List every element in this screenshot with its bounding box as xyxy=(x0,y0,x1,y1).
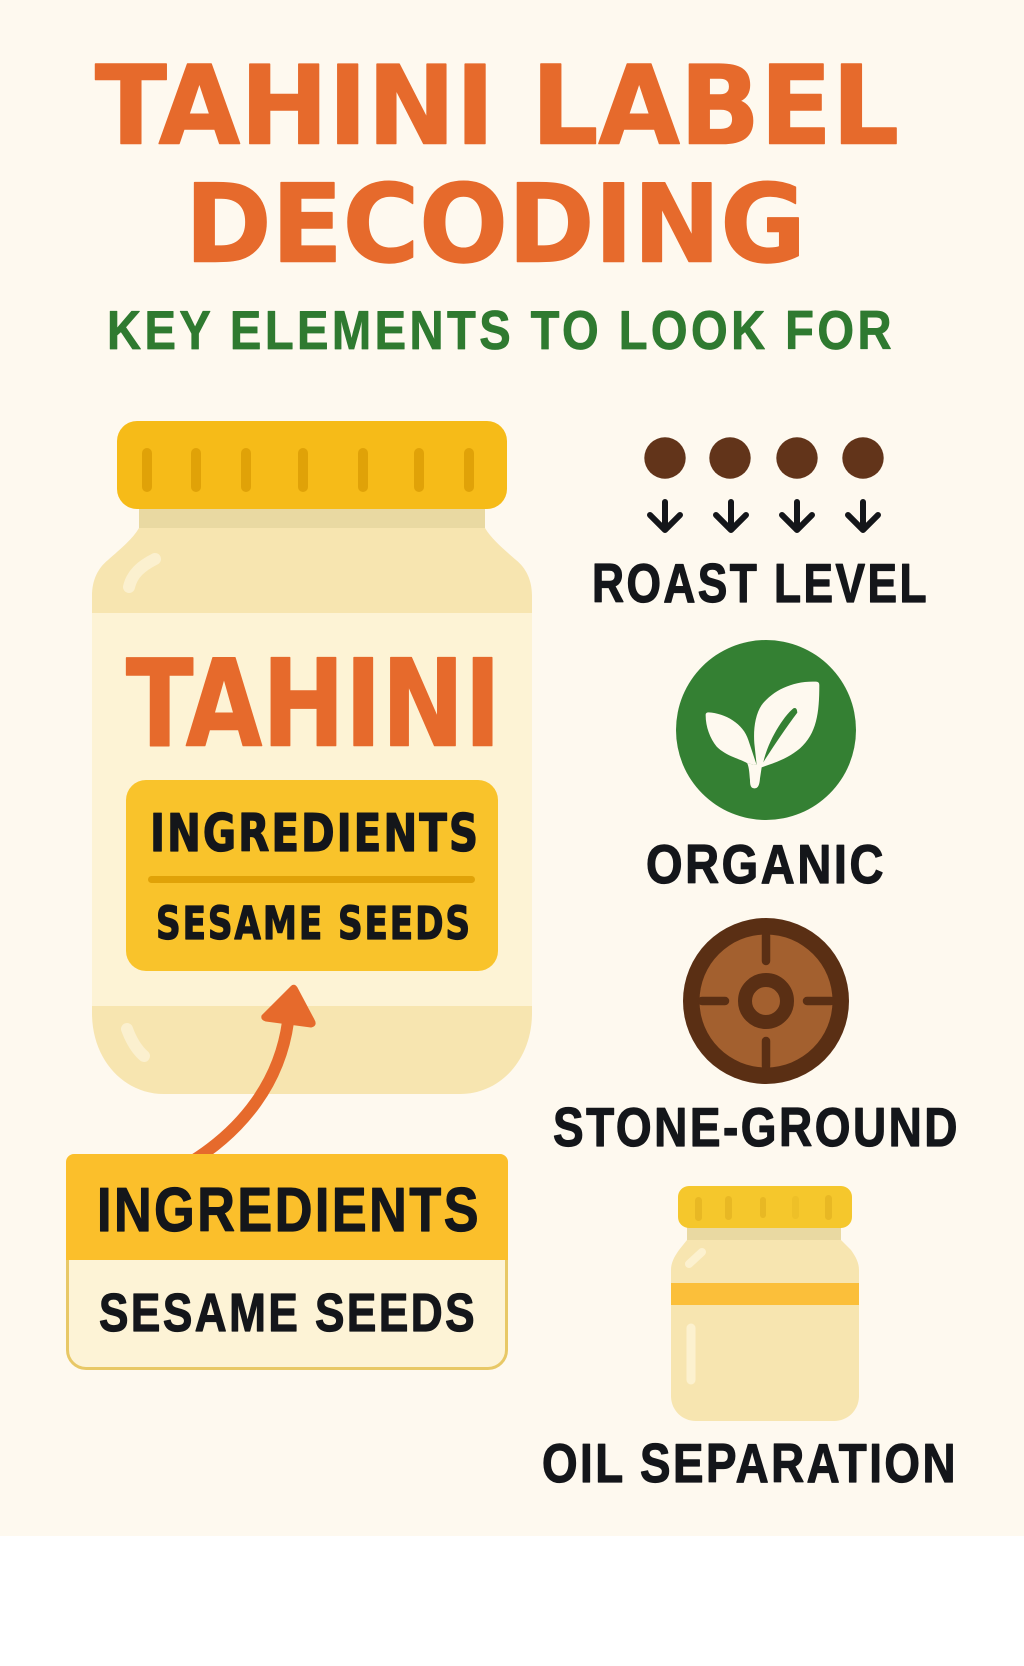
organic xyxy=(646,640,886,895)
jar label name: TAHINI xyxy=(126,636,501,774)
jar body xyxy=(92,500,532,1094)
roast level xyxy=(592,437,929,614)
label: ORGANIC xyxy=(646,833,886,895)
jar highlights xyxy=(127,559,155,1056)
callout header xyxy=(66,1154,508,1260)
large tahini jar xyxy=(92,421,532,1094)
jar lid xyxy=(117,421,507,509)
title xyxy=(95,42,899,288)
callout heading: INGREDIENTS xyxy=(97,1176,481,1245)
icon: small jar xyxy=(671,1186,859,1421)
jar ingredients panel: INGREDIENTS xyxy=(150,804,480,864)
jar ingredients panel xyxy=(126,780,498,971)
ingredients callout xyxy=(66,1154,508,1368)
subtitle: KEY ELEMENTS TO LOOK FOR xyxy=(107,299,895,361)
jar neck xyxy=(139,500,485,528)
arrow to jar ingredients xyxy=(186,986,314,1165)
icon: organic leaf xyxy=(676,640,856,820)
label: ROAST LEVEL xyxy=(592,552,929,614)
oil separation xyxy=(542,1186,958,1494)
callout body xyxy=(68,1255,506,1368)
icon: down arrows xyxy=(650,502,878,530)
title: DECODING xyxy=(185,162,806,288)
jar ingredients panel: SESAME SEEDS xyxy=(156,897,472,950)
title: TAHINI LABEL xyxy=(95,42,899,170)
icon: roast dots xyxy=(644,437,884,479)
stone-ground xyxy=(553,918,960,1158)
icon: millstone xyxy=(683,918,849,1084)
callout text: SESAME SEEDS xyxy=(99,1283,477,1343)
jar label panel xyxy=(92,613,532,1006)
